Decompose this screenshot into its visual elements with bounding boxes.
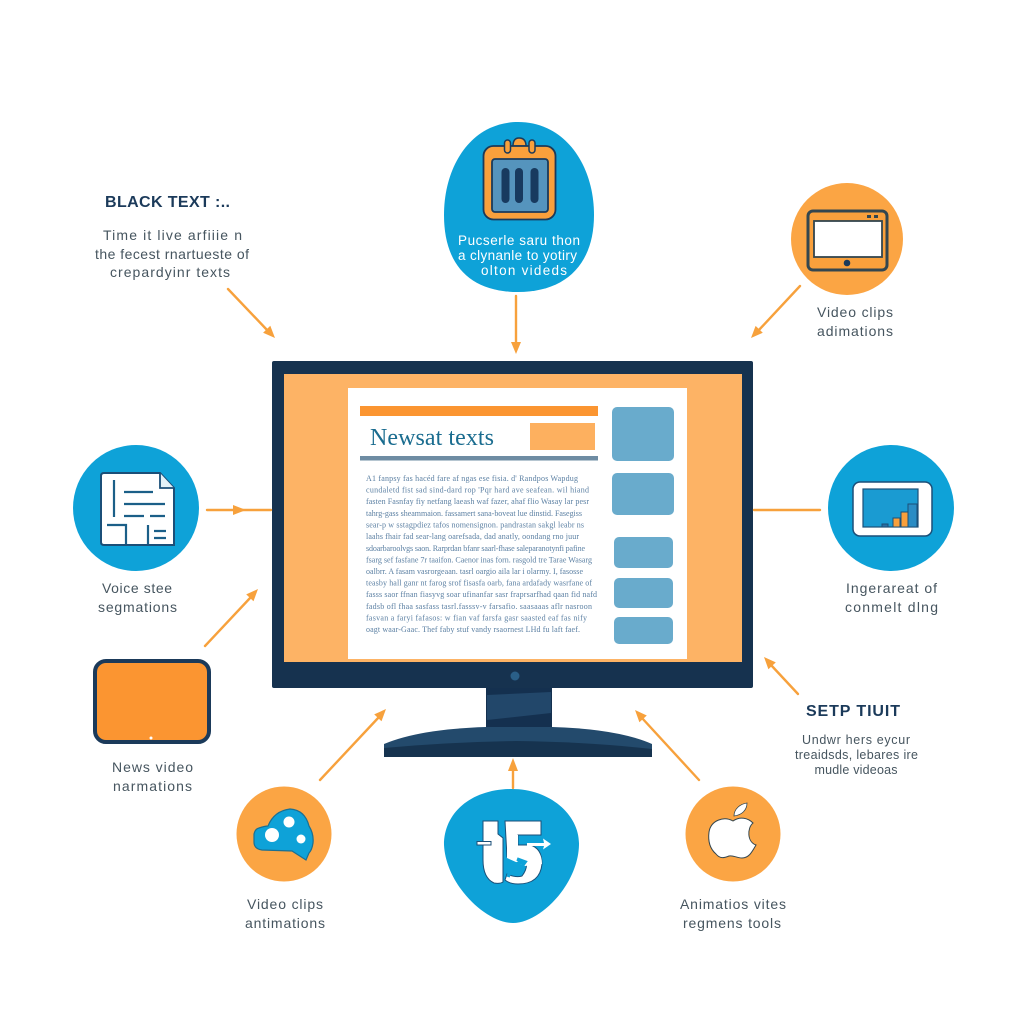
right label bbox=[845, 580, 938, 615]
arrow: left bbox=[207, 505, 271, 515]
arrow: lower right bbox=[764, 657, 798, 694]
article body text: tahrg-gass sheammaion. fassamert sana-boveat lue dinstid. Fasegiss bbox=[366, 509, 582, 518]
article body text: fsarg sef fasfane 7r taaifon. Caenor inas forn. rasgold tre Tarae Wasarg bbox=[366, 556, 592, 564]
article body text: sear-p w sstagpdiez tafos nomensignon. pandrastan sakgl leabr ns bbox=[366, 520, 584, 530]
top right label: adimations bbox=[817, 323, 893, 339]
right icon: chart on tablet bbox=[828, 445, 954, 571]
article body text: fasten Fasnfay fiy netfang laeash waf fazer, ahaf flio Wasay lar pesr bbox=[366, 497, 589, 506]
article body text bbox=[366, 474, 597, 634]
icon: t5 mark bbox=[477, 821, 551, 884]
arrow: top right bbox=[751, 286, 800, 338]
left label: Voice stee bbox=[102, 580, 172, 596]
badge text bbox=[458, 233, 580, 278]
bottom left label bbox=[245, 896, 325, 931]
article body text: sdoarbaroolvgs saon. Rarprdan bfanr saarl-fhase saleparanotynfi pafine bbox=[366, 544, 585, 553]
right label: conmelt dlng bbox=[845, 599, 938, 615]
bottom center badge: t5 logo bbox=[444, 789, 579, 923]
top left text block bbox=[95, 194, 249, 280]
bottom left label: antimations bbox=[245, 915, 325, 931]
article title: Newsat texts bbox=[370, 425, 494, 451]
article body text: A1 fanpsy fas hacéd fare af ngas ese fisia. d' Randpos Wapdug bbox=[366, 474, 578, 483]
lower right text block: mudle videoas bbox=[814, 763, 898, 777]
top center badge: calendar bbox=[444, 122, 594, 292]
bottom left label: Video clips bbox=[247, 896, 323, 912]
arrow: top left bbox=[228, 289, 275, 338]
article body text: teasby hall ganr nt farog srof fisasfa oarb, fana ardafady wasrfane of bbox=[366, 578, 592, 588]
bottom right icon: apple bbox=[686, 786, 780, 882]
right label: Ingerareat of bbox=[846, 580, 937, 596]
badge text: a clynanle to yotiry bbox=[458, 248, 577, 263]
lower right text block: treaidsds, lebares ire bbox=[795, 748, 918, 762]
badge text: Pucserle saru thon bbox=[458, 233, 580, 248]
bottom left icon: chat cloud bbox=[236, 786, 332, 882]
lower right text block: Undwr hers eycur bbox=[802, 733, 910, 747]
article body text: oagt waar-Gaac. Thef faby stuf vandy rsaornest LHd fu laft faef. bbox=[366, 625, 580, 634]
monitor screen bbox=[284, 374, 742, 662]
badge text: olton videds bbox=[481, 263, 567, 278]
bottom right label: Animatios vites bbox=[680, 896, 786, 912]
left icon: document bbox=[73, 445, 199, 571]
top left text block: Time it live arfiiie n bbox=[103, 227, 242, 243]
arrow: bottom left bbox=[320, 709, 386, 780]
arrow: top center bbox=[511, 296, 521, 354]
bottom right label: regmens tools bbox=[683, 915, 781, 931]
orange header box bbox=[530, 423, 595, 450]
article body text: oalbrr. A fasam vasrorgeaan. tasrl oargio aila lar i olarmy. I, fasosse bbox=[366, 567, 583, 576]
article body text: cundaletd fist sad sind-dard rop 'Pqr hard ave seafean. wil hiand bbox=[366, 486, 589, 494]
article body text: laahs fhair fad sear-lang oarefsada, dad anatly, oondang rno juur bbox=[366, 532, 579, 541]
bottom right label bbox=[680, 896, 786, 931]
central monitor bbox=[272, 361, 753, 757]
orange header bar bbox=[360, 406, 598, 416]
top right label: Video clips bbox=[817, 304, 893, 320]
article page bbox=[348, 388, 687, 659]
sidebar thumbnails bbox=[612, 407, 674, 644]
lower left label: News video bbox=[112, 759, 193, 775]
monitor stand bbox=[384, 688, 652, 757]
lower left icon: orange tablet bbox=[95, 661, 209, 742]
article body text: fasss saor ffnan fiasyvg soar ufinanfar sasr fraprsarfhad qaan fid nafd bbox=[366, 590, 597, 599]
top left text block: BLACK TEXT :.. bbox=[105, 194, 230, 211]
article body text: fasvan a faryi fafasos: w fian vaf farsfa gasr saasted eaf fas nify bbox=[366, 614, 587, 622]
arrow: lower left bbox=[205, 589, 258, 646]
lower right text block bbox=[795, 703, 918, 777]
arrow: bottom right bbox=[635, 710, 699, 780]
top left text block: the fecest rnartueste of bbox=[95, 246, 249, 262]
article body text: fadsb ofl fhaa sasfass tasrl.fasssv-v farsafio. saasaaas aflr nasroon bbox=[366, 602, 592, 611]
lower left label bbox=[112, 759, 193, 794]
lower left label: narmations bbox=[113, 778, 192, 794]
monitor frame bbox=[272, 361, 753, 688]
arrow: bottom center bbox=[508, 758, 518, 788]
lower right text block: SETP TIUIT bbox=[806, 703, 900, 720]
connector: right bbox=[754, 509, 820, 511]
power light bbox=[510, 672, 520, 680]
left label bbox=[98, 580, 177, 615]
top right label bbox=[817, 304, 893, 339]
icon: calendar bbox=[484, 138, 556, 220]
top left text block: crepardyinr texts bbox=[110, 264, 230, 280]
title rule bbox=[360, 456, 598, 460]
top right icon: tablet bbox=[791, 183, 903, 295]
left label: segmations bbox=[98, 599, 177, 615]
